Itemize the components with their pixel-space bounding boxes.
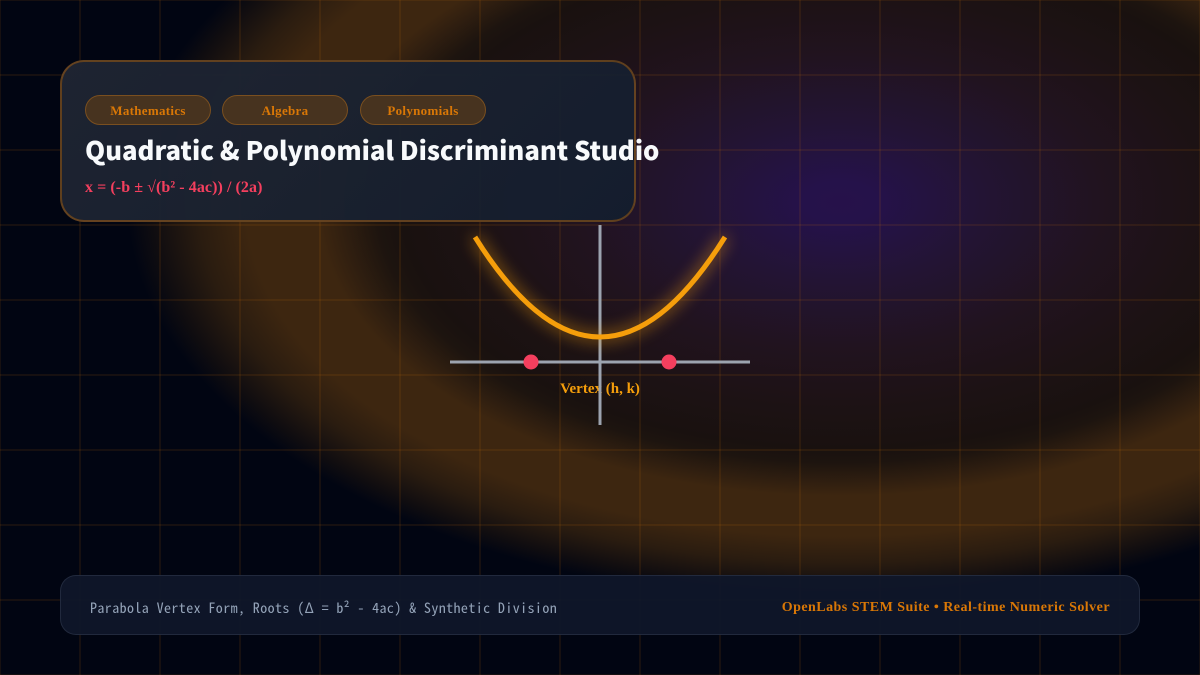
tag: Polynomials [360,95,486,125]
panel: header [60,60,636,222]
tag: Mathematics: Mathematics [110,103,186,118]
root point left [524,354,538,370]
root point right [662,354,676,370]
tag: Mathematics [85,95,211,125]
quadratic formula: x = (-b ± √(b² - 4ac)) / (2a) [85,179,262,196]
parabola curve [475,237,725,337]
tag: Algebra: Algebra [262,103,308,118]
tag: Polynomials: Polynomials [387,103,459,118]
x axis [450,360,750,364]
footer left text: Parabola Vertex Form, Roots (Δ = b² - 4ac) & Synthetic Division [90,598,557,618]
panel: footer [60,575,1140,635]
footer right text: OpenLabs STEM Suite • Real-time Numeric Solver [782,600,1110,615]
chart: parabola [450,225,750,425]
tag: Algebra [222,95,348,125]
y axis [598,225,602,425]
label: vertex: Vertex (h, k) [560,381,640,397]
title: Quadratic & Polynomial Discriminant Studio [85,131,659,168]
